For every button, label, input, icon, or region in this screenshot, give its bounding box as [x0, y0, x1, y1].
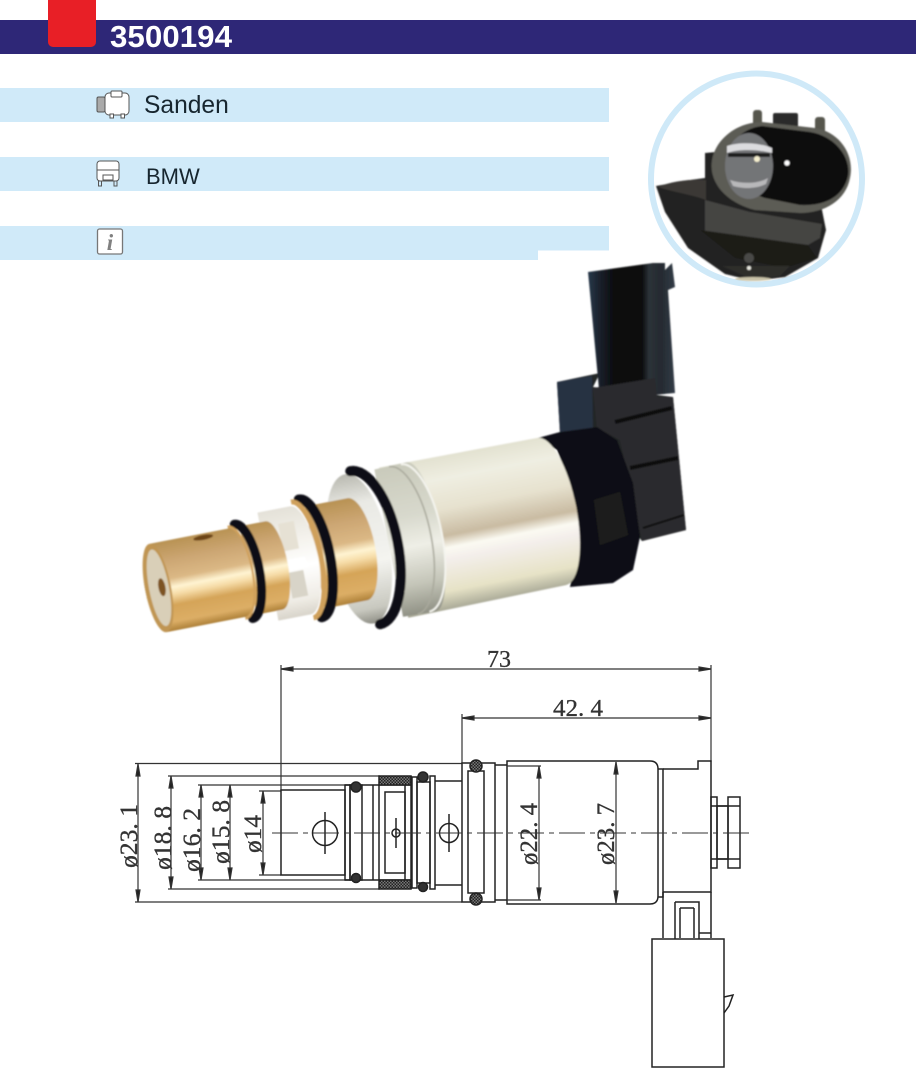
valve outline: flange and body — [462, 760, 711, 938]
dimension diameter 14 — [240, 791, 281, 875]
header band — [0, 20, 916, 54]
dimension 42.4 — [462, 696, 711, 763]
icon: info: i — [107, 230, 114, 255]
dimension 73 — [281, 647, 711, 790]
inset photo: connector end view — [651, 74, 862, 284]
dimension 42.4: 42. 4 — [553, 696, 603, 722]
dimension diameter 23.1: ø23. 1 — [116, 804, 143, 868]
product code heading: 3500194 — [110, 19, 233, 54]
dimension 73: 73 — [487, 647, 511, 673]
product photo: control valve — [130, 263, 686, 667]
dimension diameter 22.4: ø22. 4 — [516, 803, 543, 865]
dimension diameter 15.8: ø15. 8 — [208, 800, 235, 864]
dimension diameter 18.8 — [150, 776, 380, 889]
end nut — [711, 797, 740, 868]
icon: info — [98, 229, 122, 255]
dimension diameter 23.1 — [116, 764, 462, 902]
dimension diameter 22.4 — [507, 766, 543, 900]
dimension diameter 18.8: ø18. 8 — [150, 806, 177, 870]
centre line — [272, 832, 750, 834]
dimension diameter 23.7: ø23. 7 — [593, 803, 620, 865]
technical drawing — [116, 647, 750, 1067]
red badge — [48, 0, 96, 47]
valve body — [130, 430, 591, 667]
dimension diameter 15.8 — [208, 785, 235, 880]
panel: info row — [0, 226, 609, 260]
electrical connector outline — [652, 902, 733, 1067]
icon: compressor — [97, 91, 129, 118]
vehicle name: BMW — [146, 164, 200, 189]
panel: compressor brand row — [0, 88, 609, 122]
dimension diameter 14: ø14 — [240, 814, 267, 853]
brand name: Sanden — [144, 92, 229, 119]
connector housing — [538, 263, 686, 587]
dimension diameter 16.2: ø16. 2 — [179, 808, 206, 872]
valve outline: front stages — [281, 772, 462, 892]
dimension diameter 16.2 — [179, 785, 345, 880]
panel: vehicle row — [0, 157, 609, 191]
dimension diameter 23.7 — [593, 762, 620, 903]
icon: vehicle — [97, 161, 119, 186]
